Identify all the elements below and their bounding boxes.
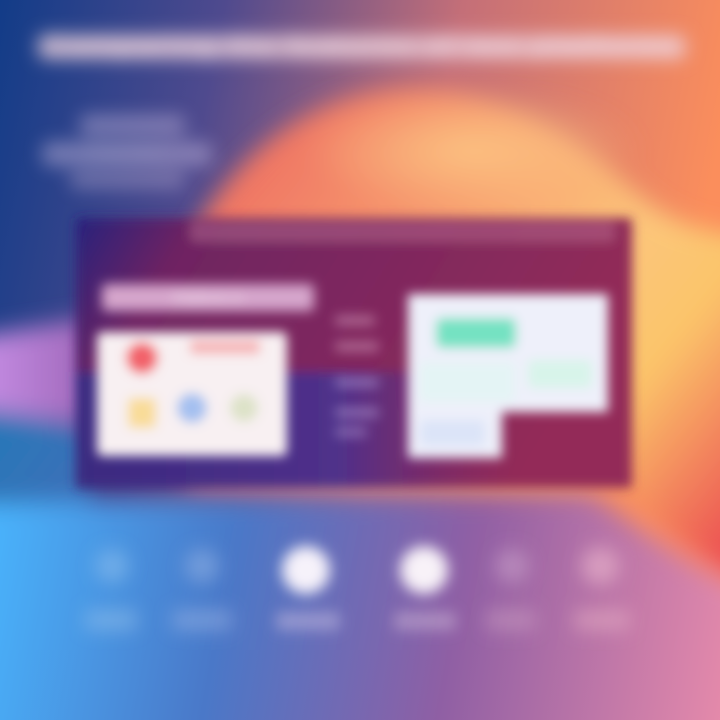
bottom wave [0, 487, 720, 650]
red label [190, 340, 260, 354]
icon 2 [172, 549, 232, 630]
pale yellow glow on hump [326, 96, 614, 199]
icon 4 [394, 546, 456, 630]
subtitle block [42, 115, 212, 188]
orange and yellow hump [190, 88, 720, 590]
green icon [230, 394, 258, 422]
main panel [76, 218, 632, 488]
green highlight [436, 318, 516, 348]
left card [97, 332, 287, 456]
icon 5 [486, 549, 536, 630]
lower blue block [420, 420, 485, 446]
yellow icon [128, 398, 156, 428]
icon: red circle [126, 342, 158, 374]
blue left wedge [0, 408, 90, 510]
blue icon [177, 393, 207, 423]
icon 1 [85, 549, 137, 630]
panel heading [190, 222, 615, 242]
icon 3 [276, 546, 340, 630]
pale green row [528, 360, 592, 388]
left card header: Platform A [173, 290, 243, 307]
icon 6 [574, 547, 630, 630]
middle comparison marks [335, 316, 379, 436]
bottom edge fill [0, 704, 720, 720]
bottom icon row [85, 546, 630, 630]
subtitle block: Overview [87, 142, 164, 162]
title: Comparing the features of two platforms [42, 32, 682, 60]
lilac wedge [0, 318, 90, 425]
left card header [102, 284, 314, 311]
right card [408, 294, 608, 458]
